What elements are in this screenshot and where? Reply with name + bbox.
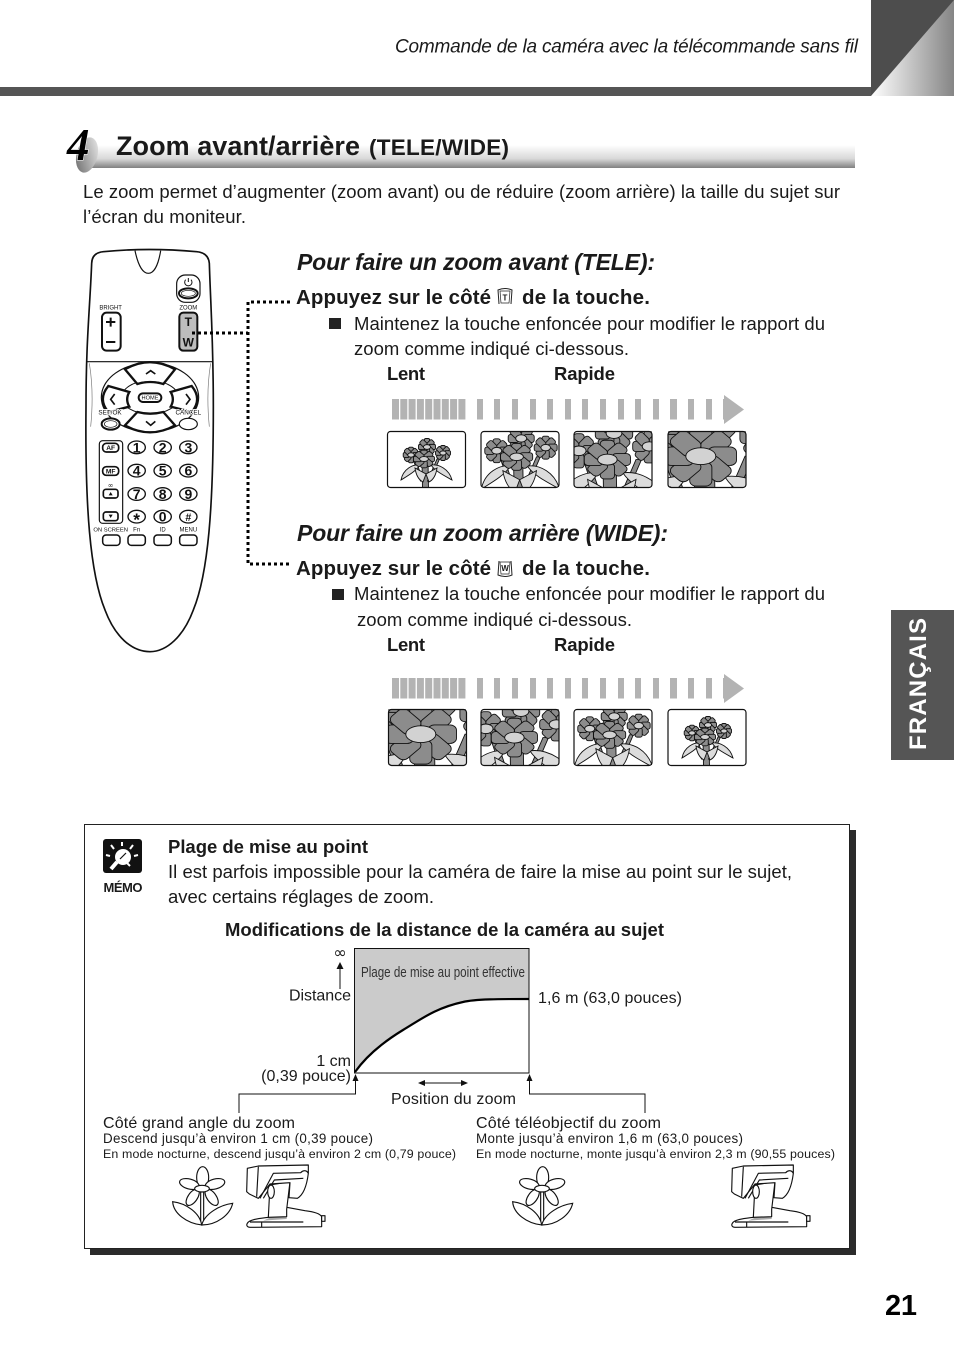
heading title: Zoom avant/arrière — [116, 131, 360, 161]
wide instruction: Appuyez sur le côté — [296, 557, 491, 580]
intro paragraph: Le zoom permet d’augmenter (zoom avant) ou de réduire (zoom arrière) la taille du sujet sur — [83, 181, 840, 202]
intro paragraph — [83, 181, 840, 227]
remote body — [86, 249, 213, 652]
running header text: Commande de la caméra avec la télécommande sans fil — [395, 36, 859, 58]
wide bullet text — [332, 583, 825, 630]
zoom rocker: ZOOM — [179, 305, 197, 311]
tele bullet text — [329, 313, 825, 359]
number keys: 3 — [184, 439, 192, 455]
home label: HOME — [142, 396, 159, 402]
chart axis labels: 1 cm — [316, 1053, 351, 1070]
number keys: 6 — [184, 463, 192, 479]
focus key column — [99, 441, 123, 523]
zoom rocker — [179, 305, 197, 351]
memo panel — [84, 824, 856, 1255]
brightness rocker — [99, 305, 122, 351]
tele bullet text: Maintenez la touche enfoncée pour modifier le rapport du — [354, 313, 825, 334]
arrow: zoom position — [418, 1080, 468, 1086]
arrow: tele side connector — [526, 1074, 645, 1113]
number keys: 5 — [159, 463, 167, 479]
wide bullet text: zoom comme indiqué ci-dessous. — [357, 609, 632, 630]
zoom rocker: T — [185, 315, 193, 329]
tele speed arrow — [392, 395, 744, 424]
memo heading: Plage de mise au point — [168, 836, 368, 857]
heading gradient bar — [92, 145, 855, 168]
tele bullet text: zoom comme indiqué ci-dessous. — [354, 338, 629, 359]
language tab — [891, 610, 954, 760]
number keys: 7 — [133, 486, 141, 502]
tele side text: Côté téléobjectif du zoom — [476, 1115, 661, 1132]
arrow: wide side connector — [239, 1074, 358, 1113]
step number icon: 4 — [66, 120, 90, 170]
icon: memo light bulb: MÉMO — [104, 880, 142, 895]
chart axis labels — [261, 943, 682, 1108]
wide instruction — [296, 557, 650, 580]
icon: W key — [498, 561, 512, 576]
focus key column: ∞ — [108, 481, 113, 489]
number keys: 2 — [159, 439, 167, 455]
direction pad — [101, 362, 199, 432]
dotted connector lines — [192, 302, 290, 564]
power button — [177, 275, 200, 302]
number keys: 0 — [159, 509, 167, 525]
wide speed labels: Rapide — [554, 634, 615, 655]
function buttons — [93, 527, 197, 545]
chart axis labels: Distance — [289, 988, 351, 1004]
icon: flower, wide side — [173, 1167, 233, 1225]
function buttons: Fn — [133, 527, 140, 533]
page number: 21 — [885, 1290, 917, 1322]
wide speed labels — [387, 634, 615, 655]
memo text: avec certains réglages de zoom. — [168, 886, 434, 907]
tele side text — [476, 1115, 835, 1161]
wide bullet text: Maintenez la touche enfoncée pour modifier le rapport du — [354, 583, 825, 604]
wide instruction: de la touche. — [522, 557, 650, 580]
tele zoom image strip — [388, 386, 796, 558]
chart axis labels: ∞ — [333, 943, 347, 962]
memo text — [168, 861, 792, 907]
tele instruction: de la touche. — [522, 286, 650, 309]
focus range chart: Plage de mise au point effective — [361, 965, 525, 981]
focus key column: MF — [106, 468, 115, 475]
number keys: # — [185, 512, 191, 524]
remote control illustration — [86, 249, 213, 652]
wide side text: Descend jusqu’à environ 1 cm (0,39 pouce) — [103, 1131, 373, 1146]
icon: memo light bulb — [103, 839, 142, 895]
tele side text: En mode nocturne, monte jusqu’à environ 2,3 m (90,55 pouces) — [476, 1147, 835, 1161]
intro paragraph: l’écran du moniteur. — [83, 206, 246, 227]
icon: camera, wide side — [247, 1165, 325, 1227]
icon: T key — [498, 288, 512, 304]
section heading — [66, 120, 855, 175]
tele instruction: Appuyez sur le côté — [296, 286, 491, 309]
number keys: 4 — [133, 463, 141, 479]
tele speed labels: Lent — [387, 363, 425, 384]
icon: flower, tele side — [513, 1167, 573, 1225]
set and cancel buttons: CANCEL — [175, 410, 202, 417]
tele speed labels: Rapide — [554, 363, 615, 384]
tele speed labels — [387, 363, 615, 384]
number keys: 1 — [133, 439, 141, 455]
chart heading: Modifications de la distance de la caméra au sujet — [225, 919, 664, 940]
function buttons: ON SCREEN — [93, 527, 128, 533]
memo text: Il est parfois impossible pour la caméra de faire la mise au point sur le sujet, — [168, 861, 792, 882]
wide side text: Côté grand angle du zoom — [103, 1115, 295, 1132]
tele instruction — [296, 286, 650, 309]
number keys: 9 — [184, 486, 192, 502]
chart axis labels: 1,6 m (63,0 pouces) — [538, 990, 682, 1007]
set and cancel buttons: SET/OK — [98, 410, 122, 417]
icon: W key: W — [501, 564, 509, 573]
wide speed arrow — [392, 674, 744, 703]
wide zoom image strip — [343, 664, 746, 836]
brightness rocker: BRIGHT — [99, 305, 122, 311]
step number icon — [66, 120, 102, 175]
function buttons: MENU — [180, 527, 197, 533]
icon: camera, tele side — [732, 1165, 810, 1227]
focus range chart — [354, 948, 529, 1073]
tele section heading: Pour faire un zoom avant (TELE): — [297, 249, 655, 275]
zoom rocker: W — [183, 336, 195, 350]
language tab: FRANÇAIS — [905, 618, 932, 750]
tele side text: Monte jusqu’à environ 1,6 m (63,0 pouces) — [476, 1131, 743, 1146]
header band — [0, 0, 954, 96]
chart axis labels: (0,39 pouce) — [261, 1068, 351, 1085]
number keys — [128, 439, 197, 529]
focus key column: AF — [106, 445, 115, 452]
number keys: * — [133, 509, 140, 529]
number keys: 8 — [159, 486, 167, 502]
icon: T key: T — [503, 294, 508, 302]
wide side text: En mode nocturne, descend jusqu’à environ 2 cm (0,79 pouce) — [103, 1147, 456, 1161]
function buttons: ID — [160, 527, 166, 533]
wide section heading: Pour faire un zoom arrière (WIDE): — [297, 520, 668, 546]
heading suffix: (TELE/WIDE) — [369, 135, 509, 160]
chart axis labels: Position du zoom — [391, 1091, 516, 1108]
wide speed labels: Lent — [387, 634, 425, 655]
wide side text — [103, 1115, 456, 1161]
set and cancel buttons — [98, 410, 202, 430]
